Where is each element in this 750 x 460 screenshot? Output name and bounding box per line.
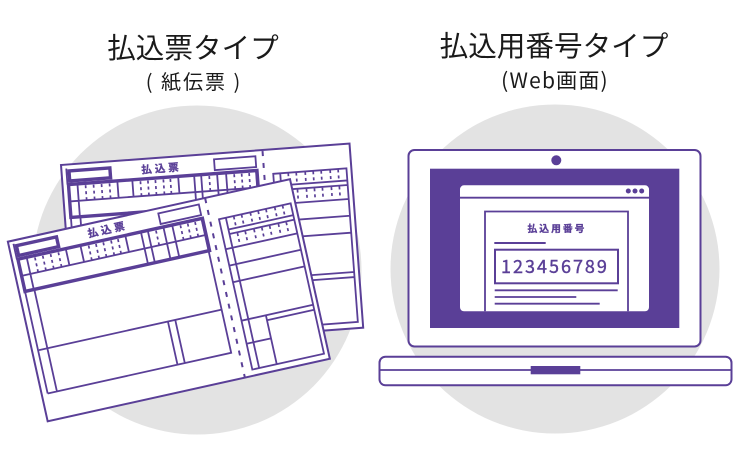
number box xyxy=(495,250,618,283)
slip label: 払込票 xyxy=(86,218,129,241)
illustration: back paper slip xyxy=(61,144,363,349)
document title: 払込用番号 xyxy=(528,221,586,235)
background circle: right xyxy=(390,104,720,434)
slip label: 払込票 xyxy=(141,160,182,178)
laptop screen xyxy=(430,169,679,328)
slip digit ticks xyxy=(86,166,340,217)
slip top-right box xyxy=(158,204,201,224)
laptop camera xyxy=(551,155,561,165)
slip sheet xyxy=(8,179,330,421)
slip digit ticks xyxy=(35,203,289,289)
heading: payment slip type: 払込票タイプ xyxy=(107,26,279,67)
slip top-left box xyxy=(69,168,111,181)
laptop base xyxy=(380,357,732,385)
rule above number xyxy=(494,242,546,244)
laptop lid xyxy=(408,150,700,346)
browser title bar rule xyxy=(460,197,649,199)
document outline xyxy=(485,212,628,311)
subheading: paper slip: ( 紙伝票 ) xyxy=(146,66,242,95)
illustration: laptop xyxy=(380,150,732,385)
heading: payment number type: 払込用番号タイプ xyxy=(440,24,669,65)
slip header box xyxy=(68,170,259,217)
laptop base seam xyxy=(380,369,732,371)
slip perforation xyxy=(263,151,276,334)
payment number: 123456789 xyxy=(501,253,609,279)
illustration: front paper slip xyxy=(8,179,330,421)
slip top-left box xyxy=(16,237,59,255)
slip top-right box xyxy=(214,156,256,170)
background circle: left xyxy=(32,106,362,434)
laptop latch xyxy=(531,366,580,374)
slip sheet xyxy=(61,144,363,349)
document text lines xyxy=(495,290,618,304)
slip header cells xyxy=(68,170,259,217)
subheading: web screen: (Web画面) xyxy=(501,65,609,95)
slip header box xyxy=(18,218,210,291)
slip perforation xyxy=(205,198,245,377)
browser dots xyxy=(626,188,644,194)
browser window xyxy=(460,185,649,311)
slip header cells xyxy=(18,218,210,291)
slip frame lines xyxy=(13,183,324,414)
slip frame lines xyxy=(66,148,358,343)
